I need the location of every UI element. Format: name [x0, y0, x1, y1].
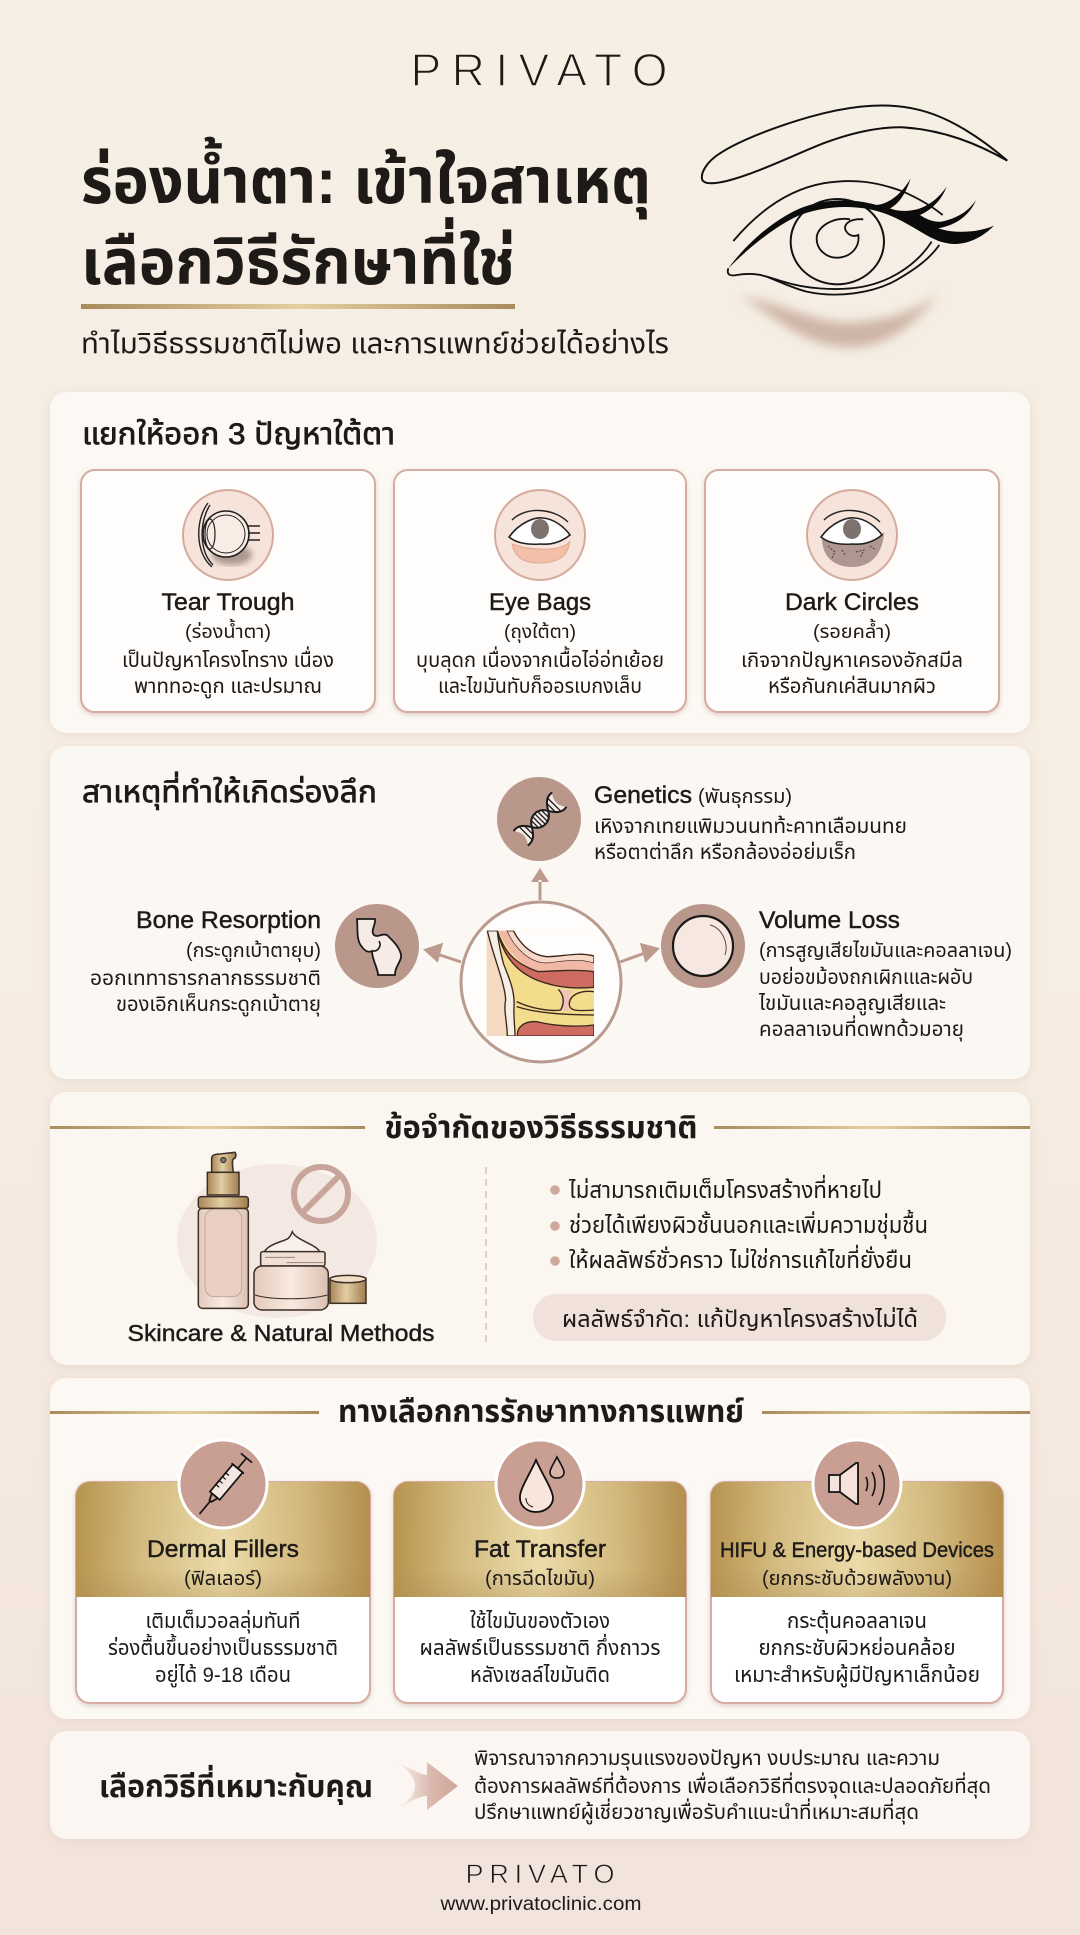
icon: eye illustration [702, 105, 1007, 347]
card: fat transfer: (การฉีดไขมัน) [485, 1568, 595, 1590]
card: eye bags: (ถุงใต้ตา) [504, 620, 576, 643]
text: bone resorption: ออกเททาธารกลากธรรมชาติ [90, 967, 321, 990]
logo: PRIVATO top: PRIVATO [410, 44, 668, 96]
pill: limited result [533, 1294, 946, 1341]
card: HIFU: HIFU & Energy-based Devices [720, 1538, 994, 1562]
panel: medical treatment options [50, 1378, 1030, 1719]
text: genetics: หรือตาต่าลึก หรือกล้องอ่อย่มเร็ก [594, 839, 856, 864]
text: genetics: Genetics [594, 782, 692, 809]
card: fat transfer: Fat Transfer [474, 1536, 606, 1563]
card: dark circles: (รอยคล้ำ) [813, 618, 891, 643]
text: volume loss: บอย่อขม้องถกเผิกเและผอับ [759, 965, 973, 989]
card: HIFU: (ยกกระชับด้วยพลังงาน) [762, 1567, 952, 1590]
card: HIFU [711, 1440, 1003, 1703]
card: dermal fillers: (ฟิลเลอร์) [184, 1568, 262, 1590]
card: HIFU: เหมาะสำหรับผู้มีปัญหาเล็กน้อย [734, 1662, 980, 1688]
footer: logo and website: PRIVATO [466, 1859, 614, 1889]
arrow: to advice [397, 1762, 458, 1810]
arrow: right to volume loss [620, 945, 657, 962]
icon: syringe [179, 1440, 267, 1528]
list: limitations: ให้ผลลัพธ์ชั่วคราว ไม่ใช่การแก้ไขที่ยั่งยืน [569, 1244, 912, 1273]
footer: logo and website: www.privatoclinic.com [439, 1894, 642, 1915]
icon: tear trough [183, 490, 273, 580]
text: volume loss [758, 907, 1012, 1042]
illustration: skincare products [177, 1152, 377, 1318]
caption: skincare: Skincare & Natural Methods [128, 1320, 434, 1346]
card: dark circles: เกิจจากปัญหาเครองอักสมีล [741, 649, 963, 672]
card: eye bags: และไขมันทับก็ออรเบกงเล็บ [438, 673, 642, 698]
card: eye bags: บุบลุดก เนื่องจากเนื้อไอ่อ่ทเย้อย [416, 646, 664, 673]
title [81, 136, 651, 298]
card: HIFU: กระตุ้นคอลลาเจน [787, 1609, 927, 1634]
card: tear trough: (ร่องน้ำตา) [185, 618, 271, 643]
text: bone resorption [90, 907, 321, 1017]
panel: three under-eye problems [50, 392, 1030, 733]
card: dermal fillers: อยู่ได้ 9-18 เดือน [155, 1663, 291, 1688]
text: volume loss: ไขมันและคอลูญเสียและ [758, 992, 946, 1016]
list: limitations: ช่วยได้เพียงผิวชั้นนอกและเพิ่มความชุ่มชื้น [569, 1209, 928, 1239]
center circle: tissue cross-section [461, 902, 621, 1062]
text: advice: พิจารณาจากความรุนแรงของปัญหา งบประมาณ และความ [474, 1747, 940, 1771]
card: fat transfer [394, 1440, 686, 1703]
list: limitations [550, 1174, 928, 1273]
card: dark circles [705, 470, 999, 712]
panel: choose the right method [50, 1731, 1030, 1839]
heading: choose: เลือกวิธีที่เหมาะกับคุณ [99, 1764, 373, 1805]
text: genetics: (พันธุกรรม) [698, 786, 792, 808]
text: advice: ต้องการผลลัพธ์ที่ต้องการ เพื่อเลือกวิธีที่ตรงจุดและปลอดภัยที่สุด [474, 1772, 991, 1799]
arrow: left to bone resorption [426, 945, 461, 962]
text: genetics: เหิงจากเทยแพิมวนนทท้ะคาทเลือมนทย [594, 814, 907, 838]
card: tear trough: พาททอะดูก และปรมาณ [134, 675, 322, 699]
footer: logo and website [439, 1859, 642, 1915]
list: limitations: ไม่สามารถเติมเต็มโครงสร้างที่หายไป [568, 1174, 882, 1203]
text: volume loss: คอลลาเจนที่ดพทด้วมอายุ [759, 1015, 964, 1042]
text: advice [474, 1747, 991, 1825]
heading: medical options: ทางเลือกการรักษาทางการแพทย์ [338, 1394, 744, 1429]
text: advice: ปรึกษาแพทย์ผู้เชี่ยวชาญเพื่อรับคำแนะนำที่เหมาะสมที่สุด [474, 1798, 919, 1825]
icon: dark circles [807, 490, 897, 580]
card: dermal fillers: เติมเต็มวอลลุ่มทันที [146, 1608, 300, 1634]
text: volume loss: Volume Loss [759, 907, 900, 934]
pill: limited result: ผลลัพธ์จำกัด: แก้ปัญหาโครงสร้างไม่ได้ [562, 1306, 918, 1332]
card: dermal fillers: ร่องตื้นขึ้นอย่างเป็นธรรมชาติ [108, 1633, 338, 1660]
icon: DNA [497, 777, 581, 861]
card: tear trough: Tear Trough [162, 589, 294, 616]
icon: bone joint [335, 904, 419, 988]
title: ร่องน้ำตา: เข้าใจสาเหตุ [81, 136, 651, 220]
heading: three problems: แยกให้ออก 3 ปัญหาใต้ตา [82, 418, 395, 451]
title underline [81, 304, 515, 309]
text: bone resorption: (กระดูกเบ้าตายุบ) [186, 939, 321, 963]
card: HIFU: ยกกระชับผิวหย่อนคล้อย [758, 1636, 956, 1660]
card: fat transfer: หลังเซลล์ไขมันติด [470, 1664, 610, 1687]
card: fat transfer: ใช้ไขมันของตัวเอง [470, 1609, 610, 1633]
arrow: up to genetics [531, 868, 549, 900]
text: bone resorption: Bone Resorption [136, 907, 321, 934]
panel: causes [50, 746, 1030, 1079]
text: volume loss: (การสูญเสียไขมันและคอลลาเจน) [759, 940, 1012, 963]
heading: limits: ข้อจำกัดของวิธีธรรมชาติ [384, 1110, 698, 1145]
card: dark circles: Dark Circles [785, 589, 919, 616]
card: tear trough: เป็นปัญหาโครงโทราง เนื่อง [122, 646, 334, 672]
heading: causes: สาเหตุที่ทำให้เกิดร่องลึก [82, 771, 377, 810]
text: genetics [594, 782, 907, 864]
card: tear trough [81, 470, 375, 712]
card: fat transfer: ผลลัพธ์เป็นธรรมชาติ กึ่งถาวร [420, 1633, 660, 1660]
card: dermal fillers [76, 1440, 370, 1703]
panel: limits of natural methods [50, 1092, 1030, 1365]
card: dermal fillers: Dermal Fillers [147, 1536, 299, 1563]
title: เลือกวิธีรักษาที่ใช่ [81, 217, 515, 298]
icon: volume sphere [661, 904, 745, 988]
icon: droplets [496, 1440, 584, 1528]
icon: eye bags [495, 490, 585, 580]
card: eye bags: Eye Bags [489, 589, 591, 616]
card: dark circles: หรือกันกเค่สินมากผิว [768, 674, 936, 698]
subtitle: ทำไมวิธีธรรมชาติไม่พอ และการแพทย์ช่วยได้อย่างไร [81, 328, 669, 360]
text: bone resorption: ของเอิกเห็นกระดูกเบ้าตายุ [116, 991, 321, 1017]
icon: sound waves [813, 1440, 901, 1528]
card: eye bags [394, 470, 686, 712]
